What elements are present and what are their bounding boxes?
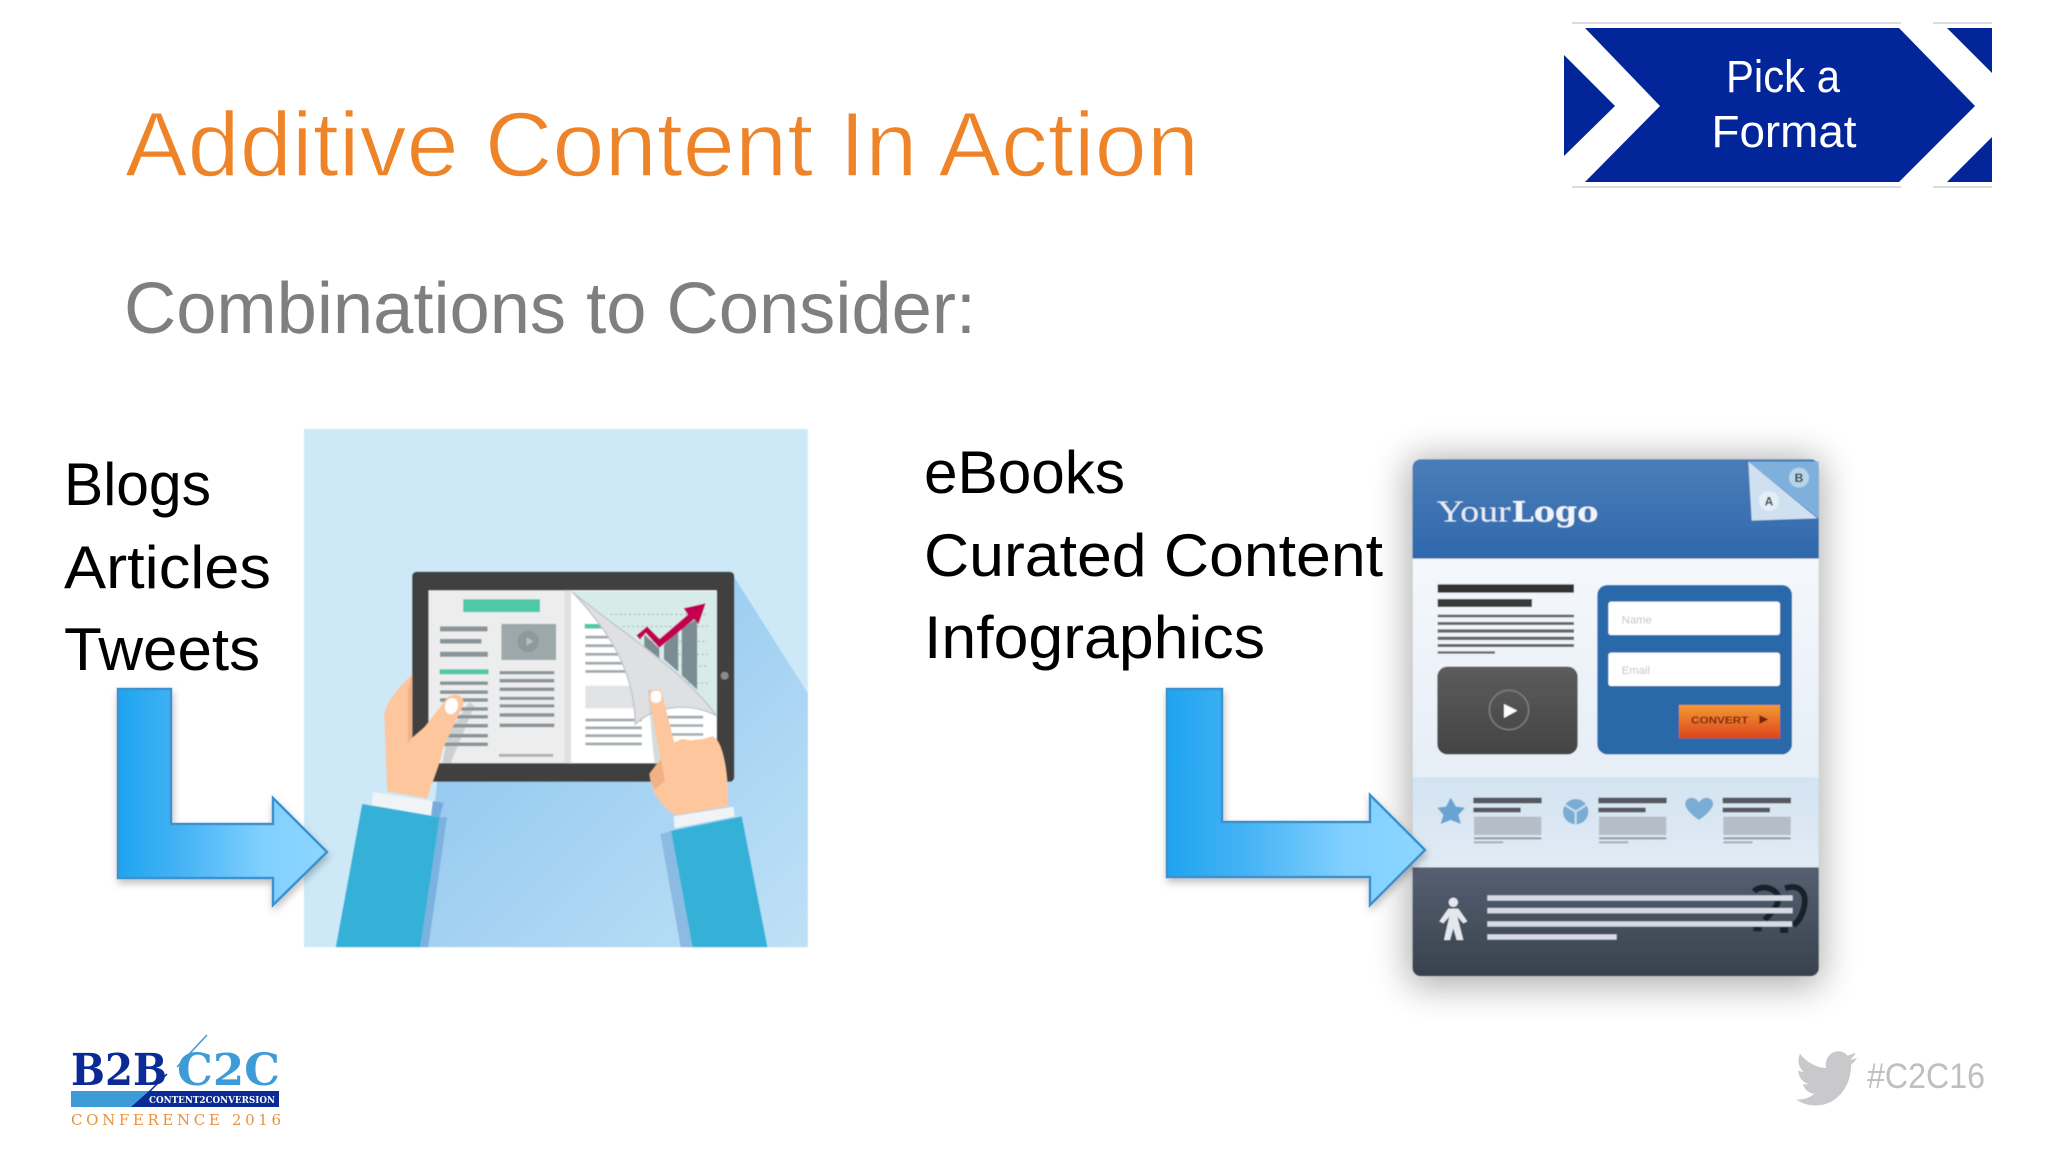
list: left formats: Articles	[64, 534, 271, 601]
signup form: Email	[1622, 665, 1650, 677]
sleeve: right	[660, 816, 767, 947]
signup form: Name	[1622, 614, 1652, 626]
logo: B2B C2C conference: C2C	[177, 1045, 280, 1096]
signup form: CONVERT	[1691, 715, 1748, 726]
list: right formats: Curated Content	[924, 522, 1383, 589]
hand: right	[648, 690, 735, 828]
arrow: left L-shaped	[118, 689, 327, 905]
copy text lines	[1438, 584, 1574, 654]
badge: Pick a Format chevron	[1564, 23, 1992, 187]
logo: B2B C2C conference: CONFERENCE 2016	[71, 1111, 281, 1129]
illustration: hands paging through a tablet	[304, 429, 808, 947]
title: Additive Content In Action	[125, 94, 1199, 196]
illustration: landing page mockup	[1413, 459, 1819, 976]
logo: B2B C2C conference	[71, 1035, 281, 1129]
list: right formats: Infographics	[924, 604, 1265, 671]
dark testimonial footer	[1413, 867, 1819, 976]
list: right formats: eBooks	[924, 439, 1125, 506]
list: left formats: Blogs	[64, 451, 211, 518]
icon: red trend arrow	[636, 603, 706, 648]
A/B corner fold: A	[1765, 494, 1774, 508]
sleeve: left	[336, 801, 447, 947]
logo: B2B C2C conference: B2B	[71, 1045, 167, 1096]
A/B corner fold	[1748, 462, 1819, 521]
feature icons and text	[1437, 798, 1791, 843]
hand: left	[372, 674, 475, 815]
list: left formats	[64, 451, 271, 683]
page header with logo: Logo	[1512, 496, 1598, 529]
badge: Pick a Format chevron: Format	[1712, 106, 1857, 157]
badge: Pick a Format chevron: Pick a	[1726, 51, 1841, 102]
page header with logo	[1413, 459, 1819, 559]
logo: B2B C2C conference: CONTENT2CONVERSION	[149, 1095, 275, 1106]
page curl	[572, 592, 716, 724]
hashtag: #C2C16	[1867, 1057, 1985, 1096]
page header with logo: Your	[1437, 495, 1511, 529]
shadow: landing page card	[1408, 458, 1822, 986]
list: right formats	[924, 439, 1383, 671]
A/B corner fold: B	[1795, 471, 1804, 485]
video thumbnail	[1437, 667, 1578, 754]
list: left formats: Tweets	[64, 616, 260, 683]
signup form	[1597, 585, 1792, 754]
arrow: right L-shaped	[1167, 689, 1425, 905]
subtitle: Combinations to Consider:	[124, 269, 976, 349]
icon: twitter bird	[1796, 1051, 1857, 1105]
